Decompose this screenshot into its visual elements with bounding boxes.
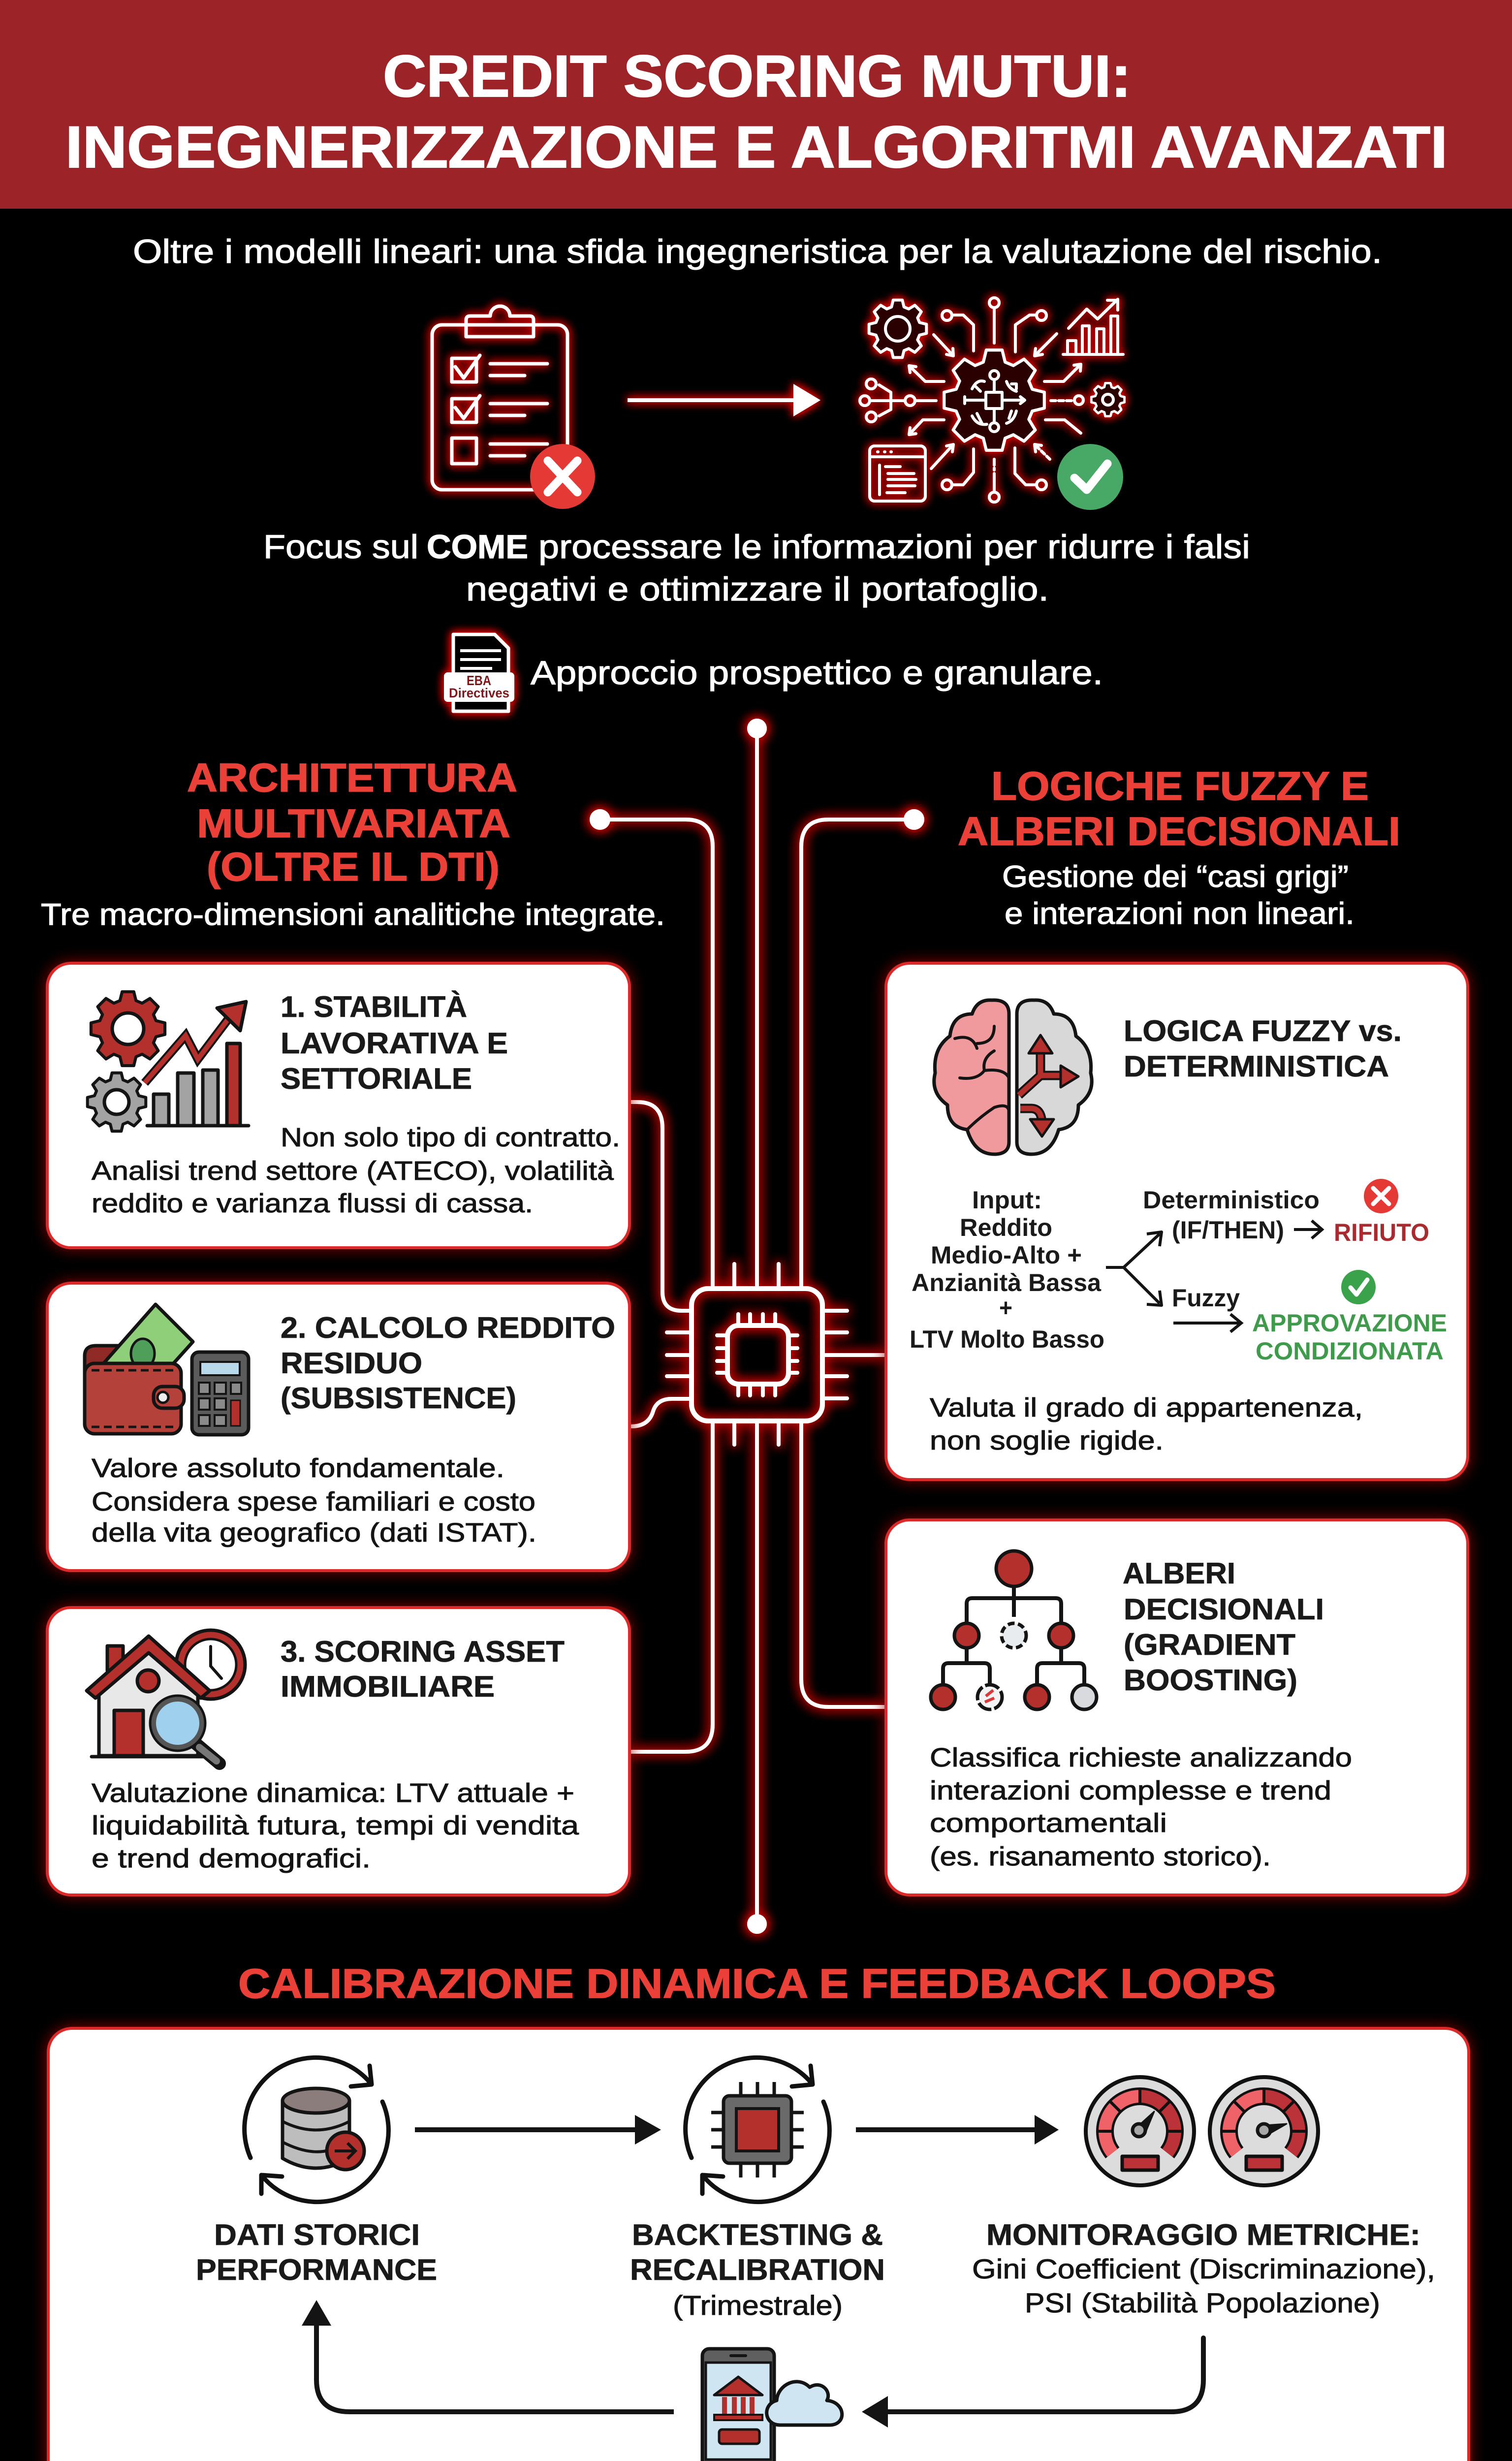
heading: dynamic calibration: CALIBRAZIONE DINAMICA E FEEDBACK LOOPS (238, 1960, 1276, 2007)
card body (92, 1453, 536, 1547)
icon: clipboard with rejection badge (432, 306, 595, 509)
icon: historical data (245, 2057, 388, 2202)
arrow: open banking to historical data (302, 2300, 674, 2412)
text: right intro: Gestione dei “casi grigi” (1002, 860, 1349, 894)
text: focus statement: Focus sul (263, 528, 418, 566)
icon: smartphone bank and cloud (702, 2349, 842, 2461)
label: historical data: DATI STORICI (214, 2218, 420, 2251)
label: metrics monitoring: MONITORAGGIO METRICHE: (986, 2218, 1420, 2251)
icon: wallet and calculator (85, 1304, 249, 1435)
text: focus statement: COME (427, 528, 528, 566)
card heading: 2. CALCOLO REDDITO (281, 1311, 615, 1344)
label: historical data: PERFORMANCE (196, 2253, 437, 2286)
input conditions: Medio-Alto + (931, 1241, 1082, 1269)
card heading: (SUBSISTENCE) (281, 1382, 516, 1415)
label: backtesting (630, 2218, 885, 2321)
text: prospective approach: Approccio prospettico e granulare. (531, 654, 1103, 692)
input conditions: Anzianità Bassa (912, 1269, 1102, 1296)
input conditions (910, 1186, 1104, 1353)
label: backtesting: RECALIBRATION (630, 2253, 885, 2286)
card body: Valuta il grado di appartenenza, (930, 1393, 1363, 1422)
label: metrics monitoring: PSI (Stabilità Popolazione) (1025, 2287, 1380, 2318)
panel: residual income (47, 1283, 630, 1571)
input conditions: LTV Molto Basso (910, 1325, 1104, 1353)
card heading: BOOSTING) (1124, 1664, 1297, 1697)
title (65, 43, 1448, 180)
card body: Valutazione dinamica: LTV attuale + (92, 1778, 574, 1808)
heading: multivariate architecture (187, 756, 517, 889)
card body: Classifica richieste analizzando (930, 1743, 1352, 1772)
circuit connectors and central microchip (590, 719, 924, 1934)
card body: non soglie rigide. (930, 1426, 1164, 1455)
card body (92, 1778, 579, 1873)
card heading: SETTORIALE (281, 1062, 472, 1095)
heading: multivariate architecture: (OLTRE IL DTI) (207, 845, 500, 889)
panel: fuzzy vs deterministic logic (886, 963, 1468, 1480)
card heading: 3. SCORING ASSET (281, 1635, 565, 1668)
card heading: RESIDUO (281, 1347, 422, 1380)
text: right intro: e interazioni non lineari. (1005, 897, 1354, 931)
text: right intro (1002, 860, 1354, 931)
card body: Considera spese familiari e costo (92, 1487, 536, 1516)
card body: e trend demografici. (92, 1844, 371, 1873)
icon: chip recalibration (686, 2057, 829, 2202)
heading: fuzzy logic and decision trees: ALBERI DECISIONALI (958, 809, 1400, 854)
label: backtesting: BACKTESTING & (632, 2218, 883, 2251)
card body: Valore assoluto fondamentale. (92, 1453, 504, 1483)
card heading (281, 990, 508, 1095)
heading: fuzzy logic and decision trees: LOGICHE FUZZY E (991, 764, 1369, 809)
heading: fuzzy logic and decision trees (958, 764, 1400, 854)
panel: decision trees (886, 1520, 1468, 1895)
text: focus statement (263, 528, 1250, 608)
subtitle: Oltre i modelli lineari: una sfida ingegneristica per la valutazione del rischio. (133, 233, 1382, 270)
card heading (281, 1311, 615, 1415)
card body: Non solo tipo di contratto. (281, 1123, 620, 1152)
panel: job stability (47, 963, 630, 1248)
card heading (1124, 1014, 1402, 1083)
icon: EBA directives document: Directives (449, 686, 509, 700)
label: metrics monitoring (972, 2218, 1435, 2318)
text: focus statement: negativi e ottimizzare il portafoglio. (466, 570, 1049, 608)
arrow: backtesting to monitoring (856, 2115, 1059, 2145)
deterministic branch: RIFIUTO (1334, 1219, 1429, 1246)
input conditions: Input: (972, 1186, 1042, 1214)
heading: multivariate architecture: MULTIVARIATA (197, 801, 510, 846)
label: historical data (196, 2218, 437, 2286)
card body (92, 1123, 620, 1218)
icon: brain with branching arrows (934, 1000, 1092, 1154)
icon: algorithm network with approval badge (860, 298, 1125, 510)
heading: multivariate architecture: ARCHITETTURA (187, 756, 517, 800)
icon: EBA directives document: EBA (467, 673, 491, 688)
card heading: LOGICA FUZZY vs. (1124, 1014, 1402, 1047)
card body: reddito e varianza flussi di cassa. (92, 1189, 533, 1218)
deterministic branch: Deterministico (1143, 1186, 1320, 1214)
fuzzy branch: Fuzzy (1172, 1284, 1240, 1312)
text: focus statement: processare le informazioni per ridurre i falsi (538, 528, 1250, 566)
card heading: DECISIONALI (1124, 1593, 1324, 1626)
label: backtesting: (Trimestrale) (673, 2290, 843, 2321)
panel: real estate scoring (47, 1608, 630, 1895)
arrow: monitoring to open banking (862, 2338, 1203, 2428)
card body: Analisi trend settore (ATECO), volatilità (92, 1156, 614, 1186)
card body (930, 1393, 1363, 1455)
fuzzy branch: CONDIZIONATA (1256, 1337, 1444, 1365)
card body: comportamentali (930, 1808, 1167, 1838)
arrow: decision fork (1106, 1232, 1162, 1305)
fuzzy branch: APPROVAZIONE (1252, 1309, 1447, 1337)
icon: house, clock and magnifier (87, 1630, 245, 1764)
card body: interazioni complesse e trend (930, 1776, 1331, 1805)
input conditions: + (999, 1294, 1012, 1322)
deterministic branch (1143, 1179, 1429, 1246)
icon: decision tree (931, 1551, 1097, 1709)
card heading: IMMOBILIARE (281, 1670, 495, 1703)
icon: EBA directives document (444, 634, 514, 711)
card heading: (GRADIENT (1124, 1628, 1295, 1661)
icon: metric gauges (1086, 2077, 1318, 2185)
card heading (281, 1635, 565, 1703)
card body: della vita geografico (dati ISTAT). (92, 1518, 536, 1547)
card body: liquidabilità futura, tempi di vendita (92, 1811, 579, 1840)
title: INGEGNERIZZAZIONE E ALGORITMI AVANZATI (65, 114, 1448, 180)
card heading: DETERMINISTICA (1124, 1050, 1389, 1083)
card body (930, 1743, 1352, 1871)
input conditions: Reddito (960, 1214, 1052, 1241)
title: CREDIT SCORING MUTUI: (383, 43, 1131, 109)
icon: gears and rising chart (88, 992, 249, 1131)
panel: feedback loop (48, 2028, 1469, 2461)
card heading: ALBERI (1123, 1557, 1235, 1590)
card heading: 1. STABILITÀ (281, 990, 467, 1023)
text: left intro: Tre macro-dimensioni analitiche integrate. (41, 898, 665, 932)
arrow: data to backtesting (415, 2115, 661, 2145)
header banner (0, 0, 1512, 209)
label: metrics monitoring: Gini Coefficient (Discriminazione), (972, 2253, 1435, 2284)
card heading (1123, 1557, 1324, 1697)
arrow: from linear to advanced (628, 384, 820, 416)
card heading: LAVORATIVA E (281, 1027, 508, 1060)
fuzzy branch (1172, 1270, 1447, 1365)
card body: (es. risanamento storico). (930, 1842, 1271, 1871)
deterministic branch: (IF/THEN) (1172, 1216, 1284, 1244)
